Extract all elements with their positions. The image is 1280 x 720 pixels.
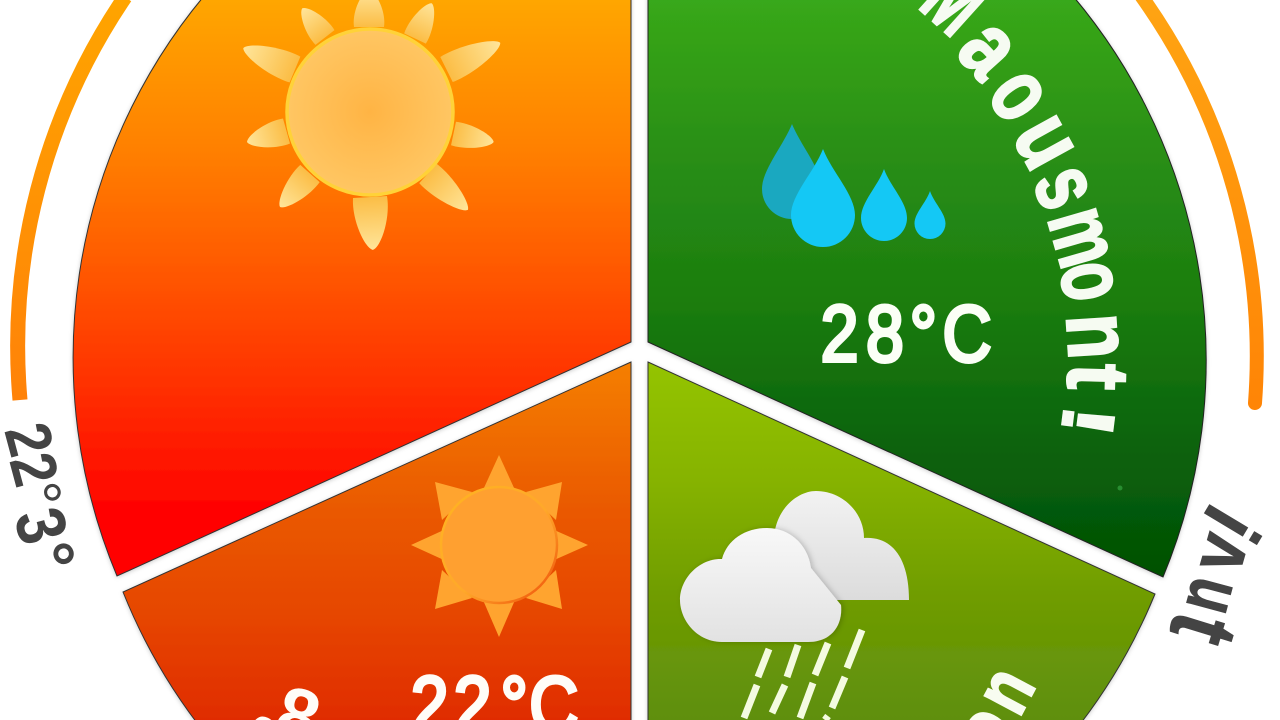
temperature: 28°C: 28°C (821, 289, 992, 378)
panel: lime rainy wedge (648, 362, 1155, 720)
curved heading: Maousmont ! (903, 0, 1152, 441)
side label: iʌut: i (1186, 491, 1278, 557)
curved heading: Maousmont !: o (1040, 252, 1148, 308)
arc: right orange gauge (1142, 0, 1257, 403)
side label: iʌut: u (1169, 569, 1260, 624)
arc: left orange gauge (18, 0, 125, 400)
curved heading: Maousmont !: a (940, 0, 1044, 97)
icon: rain streaks (744, 630, 862, 720)
side label: 22°3°: ° (4, 475, 75, 516)
curved heading: Maousmont !: u (994, 95, 1105, 184)
panel: red summer wedge (73, 0, 631, 576)
panel: green rain wedge (648, 0, 1206, 577)
icon: small sun (411, 455, 588, 637)
curved label fragment (233, 669, 329, 720)
curved heading: Maousmont !: ! (1045, 401, 1131, 441)
curved heading: Maousmont !: m (1028, 195, 1142, 277)
side label: iʌut: ʌ (1185, 526, 1276, 584)
side label: iʌut (1149, 491, 1278, 657)
side label: 22°3°: 3 (0, 500, 84, 552)
icon: large sun (238, 0, 507, 251)
side label: 22°3° (0, 415, 90, 579)
icon: water drops (762, 124, 946, 247)
side label: iʌut: t (1149, 602, 1258, 657)
curved heading: Maousmont !: o (969, 46, 1077, 139)
curved heading: Maousmont !: n (1047, 310, 1152, 362)
curved heading: Maousmont !: s (1014, 149, 1123, 222)
panel: orange mild wedge (123, 362, 631, 720)
side label: 22°3°: ° (12, 535, 90, 579)
curved heading: Maousmont !: t (1049, 362, 1147, 391)
icon: clouds (680, 491, 909, 642)
